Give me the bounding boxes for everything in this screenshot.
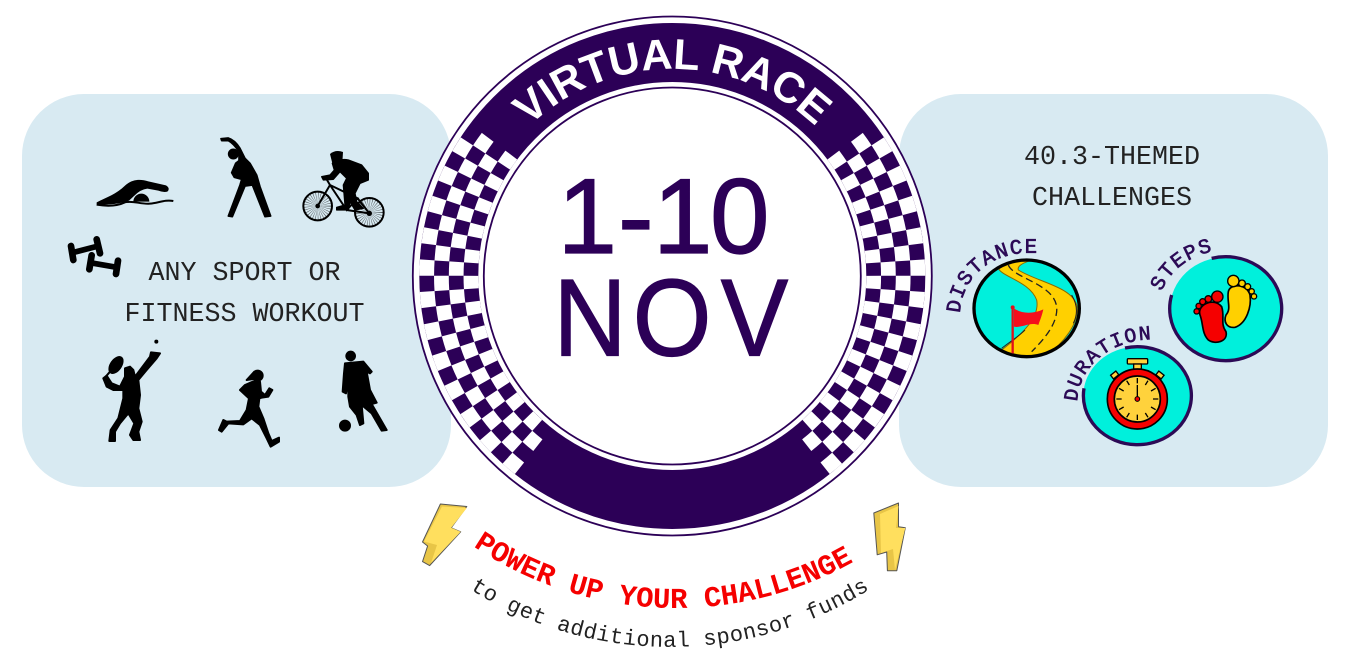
chequered pattern: right <box>807 137 918 468</box>
panel: any sport or fitness workout <box>22 94 451 487</box>
label: duration <box>1077 339 1153 402</box>
month: nov: NOV <box>553 257 789 379</box>
icon: lightning bolt left <box>422 504 467 566</box>
panel: 40.3-themed challenges <box>899 94 1328 487</box>
text: 40.3-themed challenges: 40.3-THEMED <box>1024 143 1200 173</box>
icon: soccer player <box>340 352 387 431</box>
badge: duration <box>1064 326 1194 446</box>
callout: to get additional sponsor funds: to get additional sponsor funds <box>474 578 867 648</box>
heading: virtual race: VIRTUAL RACE <box>510 39 833 126</box>
text: 40.3-themed challenges: CHALLENGES <box>1032 184 1192 214</box>
callout: power up your challenge: POWER UP YOUR CHALLENGE <box>474 531 853 608</box>
badge: duration: DURATION <box>1064 326 1150 400</box>
icon: lightning bolt right <box>874 503 905 571</box>
icon: runner <box>219 371 279 447</box>
icon: stretching figure <box>221 138 271 217</box>
badge: central race emblem <box>412 16 933 536</box>
label: steps <box>1162 251 1217 292</box>
text: any sport or fitness workout: FITNESS WORKOUT <box>124 300 364 330</box>
badge: distance <box>946 238 1081 358</box>
icon: tennis player <box>103 341 160 441</box>
date: 1-10: 1-10 <box>558 156 770 276</box>
badge: distance: DISTANCE <box>946 238 1036 312</box>
icon: cyclist <box>303 151 384 227</box>
icon: swimmer <box>97 180 173 206</box>
badge: steps <box>1150 239 1284 362</box>
badge: steps: STEPS <box>1150 239 1211 290</box>
label: distance <box>960 253 1042 313</box>
icon: dumbbells <box>71 239 118 274</box>
chequered pattern: left <box>427 137 538 468</box>
text: any sport or fitness workout: ANY SPORT OR <box>148 259 340 289</box>
